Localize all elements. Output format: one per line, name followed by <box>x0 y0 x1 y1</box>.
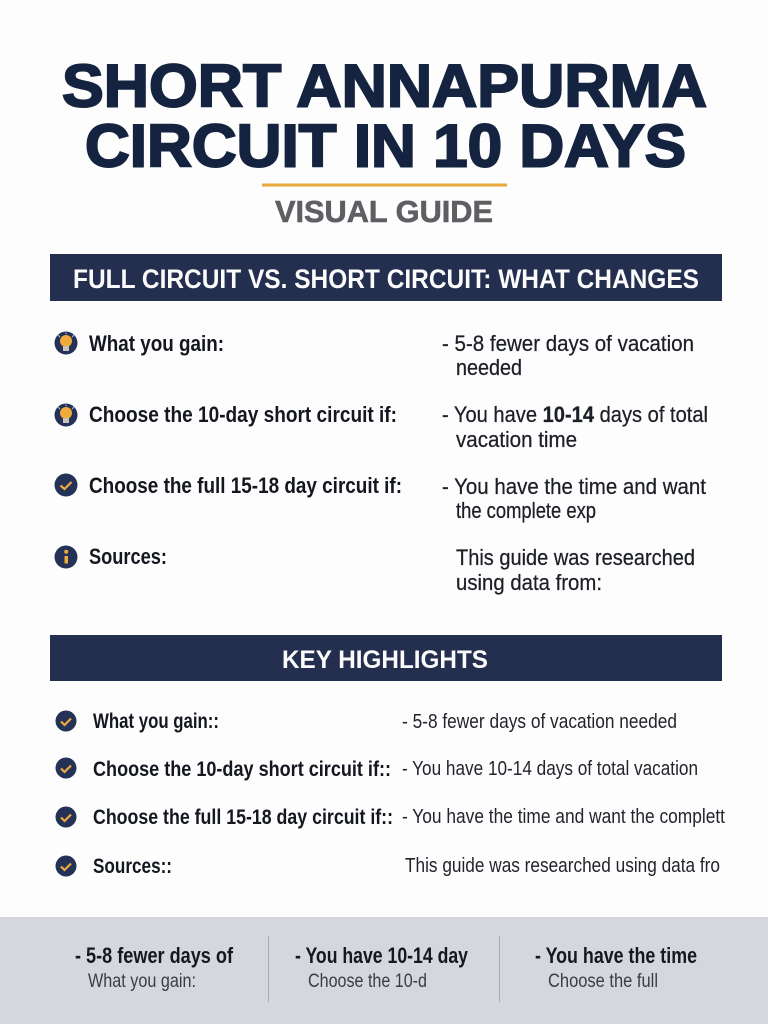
row label: choose full circuit: Choose the full 15-18 day circuit if: <box>89 473 402 498</box>
row text: choose full circuit: the complete exp <box>456 498 596 523</box>
footer panel <box>0 917 768 1024</box>
row text: what you gain: - 5-8 fewer days of vacation <box>442 331 694 356</box>
row text: what you gain <box>442 331 694 380</box>
icon: check <box>54 474 78 496</box>
row label: what you gain: What you gain: <box>89 331 224 356</box>
icon: light bulb <box>54 332 78 354</box>
row text: choose short circuit <box>442 402 708 452</box>
title underline <box>262 184 507 186</box>
row text: choose short circuit: - You have 10-14 days of total <box>442 402 708 427</box>
heading bar: what changes <box>50 254 722 301</box>
heading bar: what changes: FULL CIRCUIT VS. SHORT CIRCUIT: WHAT CHANGES <box>73 264 699 294</box>
highlight text: choose full circuit: - You have the time and want the complett <box>402 806 725 828</box>
row text: choose full circuit: - You have the time and want <box>442 474 706 499</box>
highlight text: choose short circuit: - You have 10-14 days of total vacation <box>402 758 698 780</box>
footer stat: short circuit: Choose the 10-d <box>308 970 427 992</box>
footer stat: what you gain: What you gain: <box>88 970 196 992</box>
footer stat: full circuit: Choose the full <box>548 970 658 992</box>
highlight label: what you gain: What you gain:: <box>93 710 219 733</box>
row text: choose full circuit <box>442 474 706 523</box>
title <box>62 52 707 180</box>
footer stat: short circuit: - You have 10-14 day <box>295 943 469 968</box>
subtitle: VISUAL GUIDE <box>275 194 493 229</box>
row label: sources: Sources: <box>89 544 167 569</box>
row text: sources: using data from: <box>456 570 602 595</box>
icon: check <box>56 856 76 876</box>
panel: full circuit vs short circuit <box>50 254 722 595</box>
highlight text: sources: This guide was researched using data fro <box>405 855 720 877</box>
heading bar: key highlights: KEY HIGHLIGHTS <box>282 646 488 674</box>
row text: what you gain: needed <box>456 355 522 380</box>
panel: key highlights <box>50 635 725 878</box>
highlight label: choose short circuit: Choose the 10-day short circuit if:: <box>93 758 391 781</box>
icon: light bulb <box>54 404 78 426</box>
heading bar: key highlights <box>50 635 722 681</box>
icon: check <box>56 758 76 778</box>
title: SHORT ANNAPURMA <box>62 52 707 120</box>
icon: check <box>56 806 76 828</box>
footer stat: what you gain: - 5-8 fewer days of <box>75 943 234 968</box>
row text: choose short circuit: vacation time <box>456 427 577 452</box>
icon: check <box>56 710 76 732</box>
highlight text: what you gain: - 5-8 fewer days of vacation needed <box>402 711 677 733</box>
row label: choose short circuit: Choose the 10-day short circuit if: <box>89 402 397 427</box>
footer stat: short circuit <box>295 943 469 992</box>
footer stat: full circuit <box>535 943 697 992</box>
icon: info <box>54 546 78 568</box>
highlight label: sources: Sources:: <box>93 855 172 878</box>
title: CIRCUIT IN 10 DAYS <box>85 112 686 180</box>
highlight label: choose full circuit: Choose the full 15-18 day circuit if:: <box>93 806 393 829</box>
row text: sources <box>456 545 695 595</box>
footer stat: full circuit: - You have the time <box>535 943 697 968</box>
row text: sources: This guide was researched <box>456 545 695 570</box>
footer stat: what you gain <box>75 943 234 992</box>
